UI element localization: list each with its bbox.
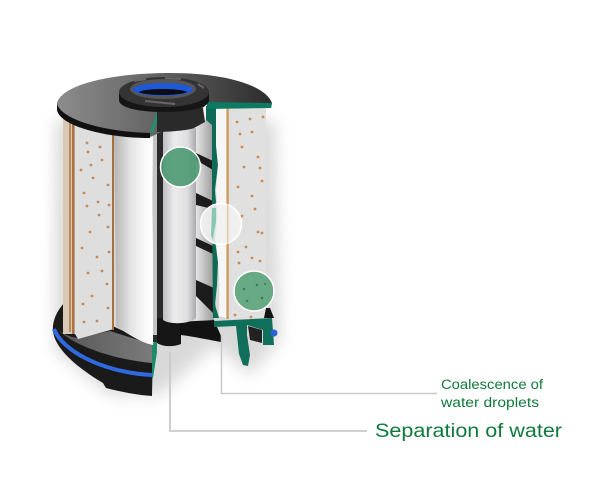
label: coalescence of water droplets: Coalescence of [441,377,543,392]
leader line: separation [170,352,367,431]
top collar and blue inlet [119,77,209,132]
green base section and legs [214,308,278,366]
label: separation of water: Separation of water [375,420,563,442]
leader line: coalescence [222,335,437,394]
lower black cylinder [157,318,181,346]
left dotted filter panel [75,125,114,339]
magnifier circle: lower [234,271,274,311]
central tube [163,128,196,323]
left fluffy white media [114,134,154,345]
label: coalescence of water droplets [440,377,543,410]
blue O-ring dot [270,330,278,336]
label: coalescence of water droplets: water droplets [440,395,539,410]
dark inner gap [153,130,163,342]
magnifier circle: middle [200,204,242,244]
magnifier circle: upper [160,147,200,187]
filter cartridge [53,73,278,396]
drop shadow [55,120,280,395]
green cut edge of plate [152,337,157,378]
top disc [57,73,272,138]
bottom plate [53,303,157,396]
back wall and ribs [196,120,216,320]
green inner seal edge [206,106,219,318]
left outer wrap layers [63,118,76,334]
right fluffy media [216,108,226,318]
right dotted filter panel [226,108,266,319]
